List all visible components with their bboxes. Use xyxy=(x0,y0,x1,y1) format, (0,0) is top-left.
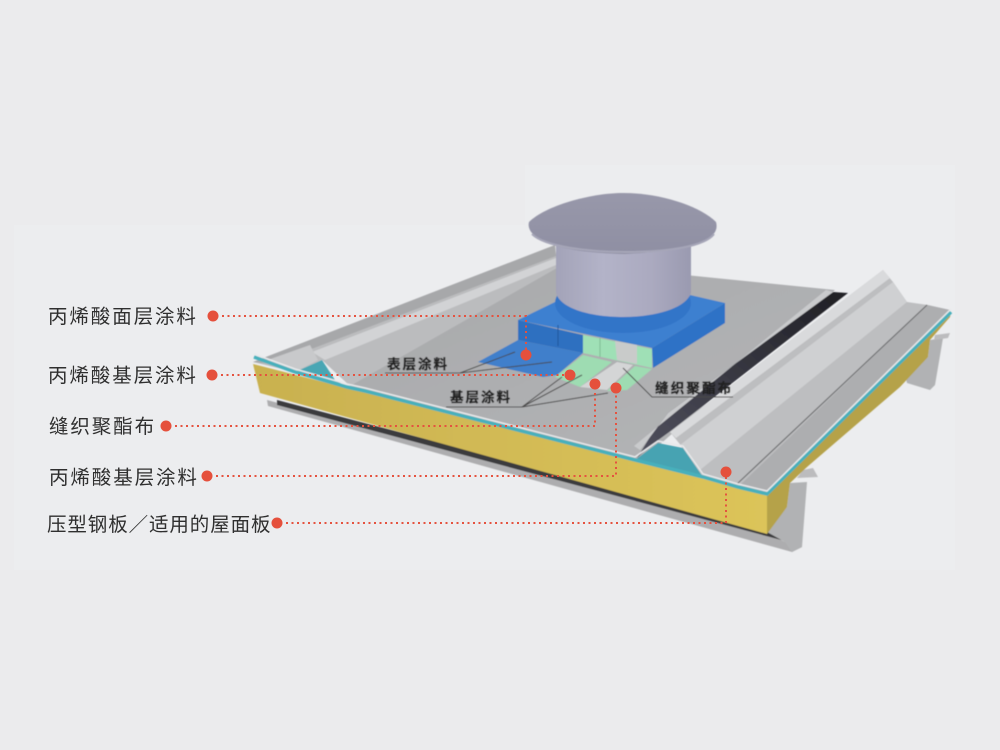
green base coating and fabric xyxy=(555,335,652,391)
black channel xyxy=(637,292,848,458)
annotation leaders xyxy=(385,352,733,407)
lighter image backdrop xyxy=(14,165,955,570)
label: acrylic base coat 2: 丙烯酸基层涂料 xyxy=(49,467,199,489)
annotation: base coating: 基层涂料 xyxy=(450,389,512,405)
leader: profiled steel xyxy=(272,466,732,528)
blue vent base xyxy=(518,273,725,368)
blue coating on roof xyxy=(478,340,583,377)
leader: stitched polyester fabric xyxy=(160,378,600,432)
steel deck underside xyxy=(267,333,950,552)
label: profiled steel and applicable roof panels: 压型钢板／适用的屋面板 xyxy=(47,514,271,536)
vent cylinder xyxy=(556,240,691,317)
label: acrylic base coat 1: 丙烯酸基层涂料 xyxy=(48,365,198,387)
annotation: surface coating: 表层涂料 xyxy=(387,356,449,372)
annotation: stitched polyester fabric: 缝织聚酯布 xyxy=(655,380,734,396)
left rib xyxy=(253,245,557,387)
leader: acrylic base coat 1 xyxy=(206,370,576,380)
right rib and panel xyxy=(635,270,950,493)
teal insulation strip xyxy=(254,312,951,494)
leader: acrylic base coat 2 xyxy=(202,382,622,482)
rock wool core side xyxy=(767,312,951,534)
label: acrylic top coat: 丙烯酸面层涂料 xyxy=(48,306,198,328)
roof panel illustration xyxy=(253,193,951,552)
leader: acrylic top coat xyxy=(208,310,532,360)
label: stitched polyester fabric: 缝织聚酯布 xyxy=(49,416,156,438)
flat roof sheet xyxy=(350,262,835,462)
rock wool core front xyxy=(253,364,767,534)
vent dome cap xyxy=(529,193,717,254)
